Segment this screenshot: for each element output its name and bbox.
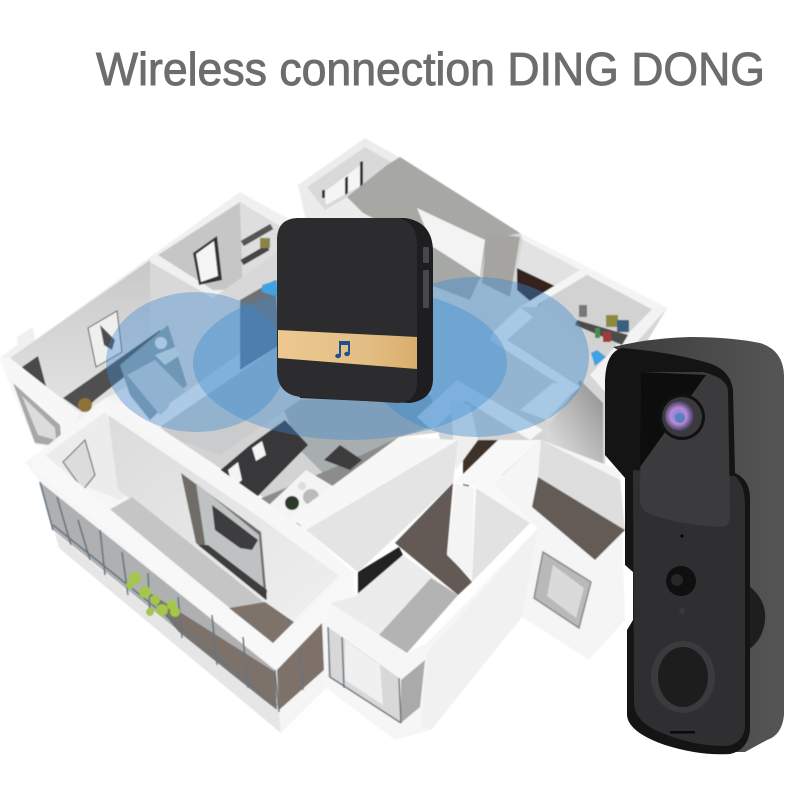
floor plan house illustration [0,138,667,740]
wall band [110,396,354,578]
icon: laptop [591,350,606,366]
radiator [22,356,47,395]
doorbell lower face [633,470,745,746]
glossy black reflection [640,372,706,467]
upper left rooms [0,192,300,470]
sofa and bed [63,330,165,412]
upper right concrete wall and rooms [347,157,667,492]
balcony glass [40,482,277,710]
chime side edge [300,218,433,403]
hallway and lower rooms [290,437,625,740]
mid right walls [417,300,580,490]
balcony room [25,396,354,733]
side buttons [423,247,429,308]
wireless signal: right blue ellipse [365,277,589,437]
doorbell back shell [613,337,784,752]
left side window [0,358,80,450]
right room [494,440,625,660]
icon: wall shelf [241,224,273,265]
video doorbell device [605,337,784,754]
icon: music note [335,341,350,358]
speaker slot [670,731,695,734]
wireless signal: left blue ellipse [106,292,286,432]
indicator light [679,608,685,614]
gold band [278,330,417,369]
wireless signal: central blue ellipse [193,286,507,440]
upper glossy panel [640,372,730,527]
camera lens [659,394,705,440]
microphone dot [680,534,684,538]
living room floor and sofa [160,345,460,527]
doorbell front outline [605,348,750,754]
mounting clip [748,585,765,650]
coffee table [269,470,336,527]
top small room [298,138,420,240]
icon: bookshelf [575,305,629,345]
chime face [277,218,417,403]
title: Wireless connection DING DONG [96,43,765,95]
wall painting [88,311,122,367]
ring button [651,641,715,713]
PIR sensor [666,566,696,596]
window [534,552,591,628]
plant leaves [126,572,180,617]
icon: sofa [217,420,400,527]
chime receiver device [277,218,433,403]
door in back room [193,236,222,285]
